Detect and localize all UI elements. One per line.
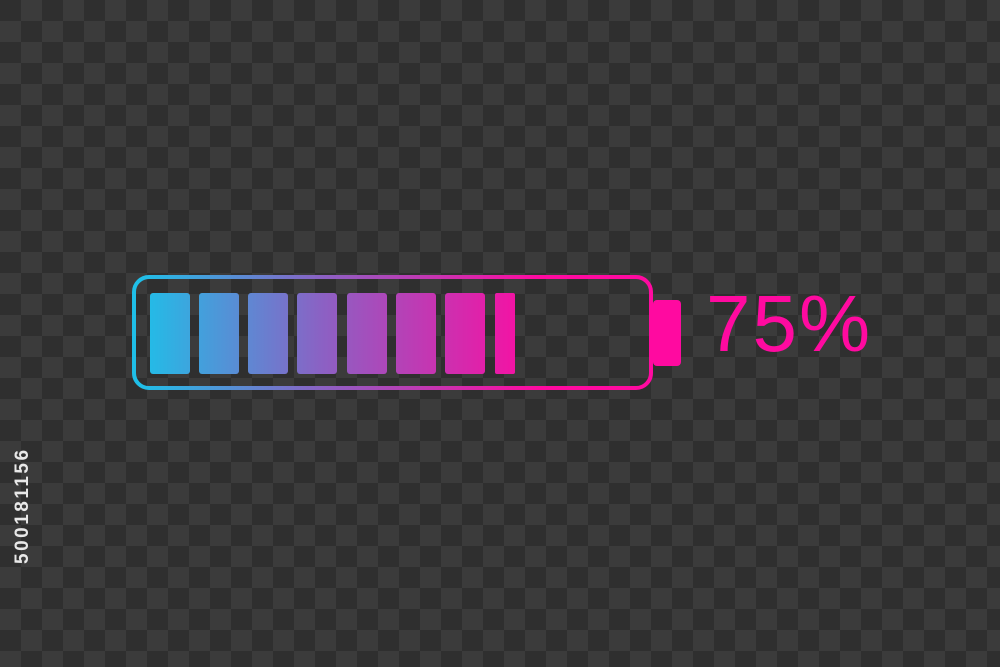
battery terminal [653, 300, 681, 366]
battery outline [134, 277, 651, 388]
charge bars [150, 293, 515, 374]
stock id text: 500181156 [12, 447, 33, 564]
percentage label: 75% [706, 279, 872, 368]
